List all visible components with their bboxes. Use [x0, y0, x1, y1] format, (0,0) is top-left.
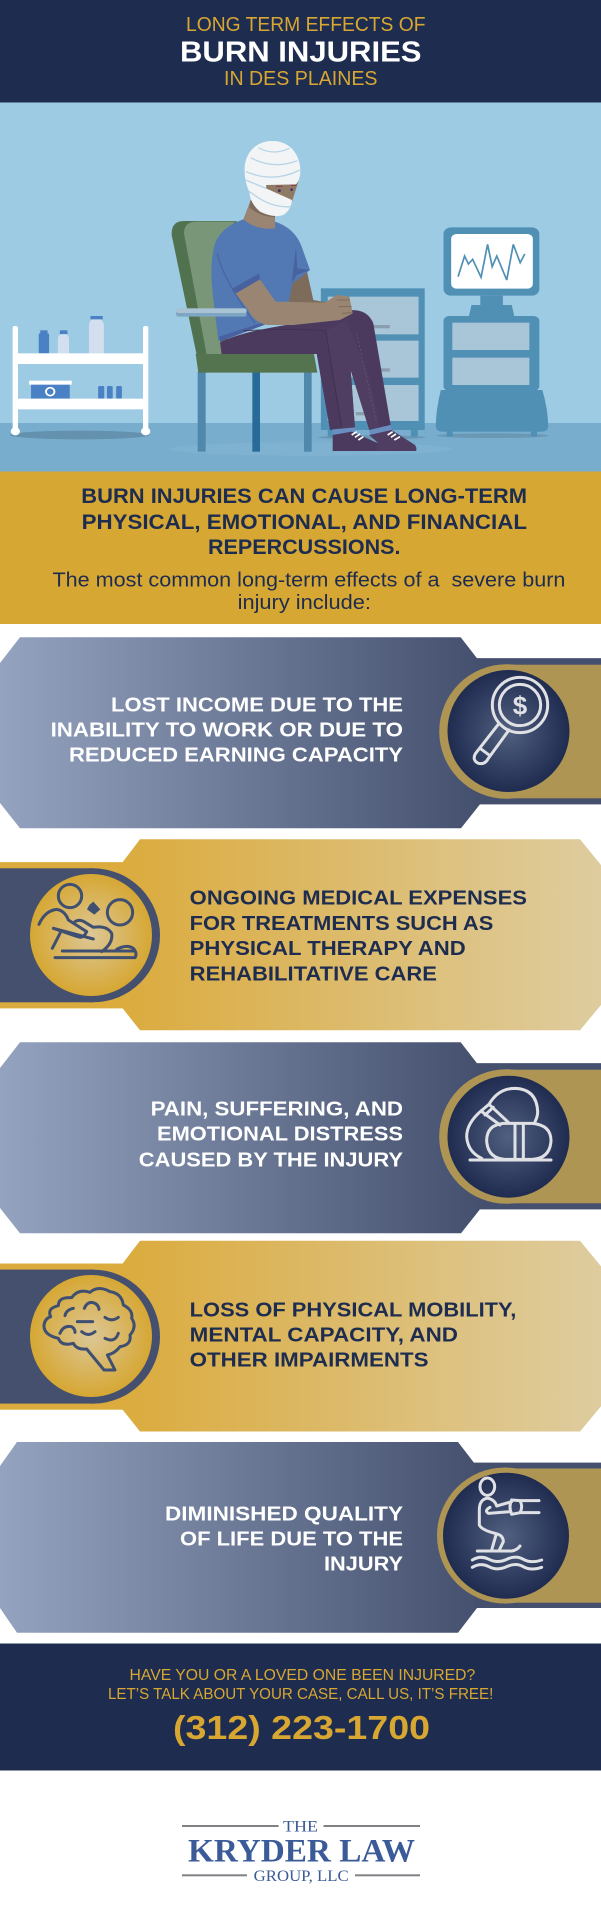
- text: medical expenses: PHYSICAL THERAPY AND: [190, 937, 466, 960]
- logo: KRYDER LAW: [188, 1834, 415, 1870]
- intro text: The most common long-term effects of a severe burn: [52, 570, 565, 592]
- title line 1: LONG TERM EFFECTS OF: [186, 14, 426, 36]
- back arm: [288, 270, 328, 308]
- chair: [172, 221, 317, 452]
- text: pain and suffering: [139, 1098, 403, 1172]
- torso: [211, 219, 310, 341]
- text: medical expenses: REHABILITATIVE CARE: [190, 963, 437, 986]
- text: loss of mobility: MENTAL CAPACITY, AND: [190, 1324, 458, 1347]
- face: [266, 182, 298, 202]
- intro heading: PHYSICAL, EMOTIONAL, AND FINANCIAL: [82, 511, 527, 534]
- footer call to action: [0, 1644, 601, 1770]
- call to action text: [108, 1667, 493, 1703]
- intro text: injury include:: [238, 592, 371, 614]
- icon: water skier: [472, 1478, 542, 1569]
- icon: brain: [44, 1288, 134, 1370]
- socks and shoes: [333, 425, 416, 451]
- text: loss of mobility: [190, 1299, 516, 1372]
- text: lost income: INABILITY TO WORK OR DUE TO: [51, 719, 403, 742]
- heart monitor: [436, 227, 549, 438]
- text: quality of life: OF LIFE DUE TO THE: [180, 1528, 403, 1551]
- logo: THE: [283, 1819, 318, 1836]
- title line 2: BURN INJURIES: [180, 37, 422, 69]
- supply cart: [10, 316, 150, 439]
- text: medical expenses: FOR TREATMENTS SUCH AS: [190, 912, 493, 935]
- armrest: [176, 308, 247, 317]
- header: [0, 0, 601, 102]
- icon: pills: [467, 1088, 551, 1160]
- text: medical expenses: [190, 886, 527, 986]
- text: loss of mobility: OTHER IMPAIRMENTS: [190, 1349, 428, 1372]
- icon: magnifier with dollar: [474, 677, 548, 764]
- text: quality of life: [165, 1503, 403, 1576]
- title line 3: IN DES PLAINES: [224, 68, 378, 90]
- intro heading: BURN INJURIES CAN CAUSE LONG-TERM: [81, 485, 527, 508]
- call to action text: HAVE YOU OR A LOVED ONE BEEN INJURED?: [130, 1667, 476, 1684]
- drawer cabinet: [318, 288, 425, 439]
- panel: quality of life: [0, 1442, 601, 1633]
- phone number: (312) 223-1700: [173, 1709, 430, 1746]
- text: loss of mobility: LOSS OF PHYSICAL MOBILITY,: [190, 1299, 516, 1322]
- text: pain and suffering: PAIN, SUFFERING, AND: [151, 1098, 403, 1121]
- forearm and hands: [235, 277, 353, 325]
- patient on chair: [172, 141, 416, 452]
- neck: [243, 200, 275, 229]
- icon: magnifier with dollar: $: [513, 690, 528, 720]
- text: pain and suffering: EMOTIONAL DISTRESS: [157, 1123, 403, 1146]
- head bandage: [245, 141, 300, 216]
- text: quality of life: DIMINISHED QUALITY: [165, 1503, 403, 1526]
- legs: [220, 310, 391, 430]
- intro heading: [81, 485, 527, 559]
- text: medical expenses: ONGOING MEDICAL EXPENSES: [190, 886, 527, 909]
- illustration: hospital room: [0, 102, 601, 472]
- icon: physical therapy: [39, 884, 136, 958]
- panel: loss of mobility: [0, 1241, 601, 1432]
- text: lost income: REDUCED EARNING CAPACITY: [69, 744, 403, 767]
- text: quality of life: INJURY: [324, 1553, 403, 1576]
- panel: lost income: [0, 637, 601, 828]
- medical furniture: [10, 227, 549, 456]
- intro heading: REPERCUSSIONS.: [208, 536, 400, 559]
- call to action text: LET’S TALK ABOUT YOUR CASE, CALL US, IT’S FREE!: [108, 1686, 493, 1703]
- text: lost income: [51, 694, 403, 767]
- panel: pain and suffering: [0, 1042, 601, 1233]
- gold intro panel: [0, 472, 601, 624]
- intro text: [52, 570, 565, 614]
- logo: GROUP, LLC: [254, 1868, 349, 1885]
- text: pain and suffering: CAUSED BY THE INJURY: [139, 1149, 403, 1172]
- logo: [182, 1819, 420, 1885]
- panel: medical expenses: [0, 839, 601, 1030]
- text: lost income: LOST INCOME DUE TO THE: [111, 694, 403, 717]
